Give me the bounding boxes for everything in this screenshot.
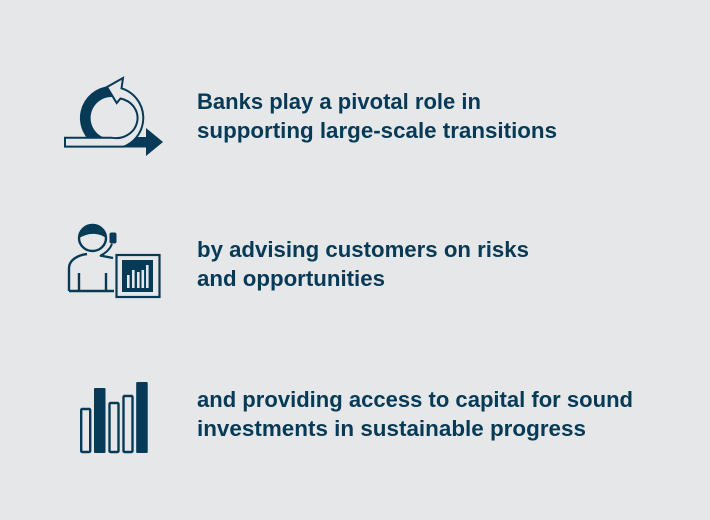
text: access to capital: and providing access to capital for sound xyxy=(197,387,633,412)
text: access to capital xyxy=(197,387,633,441)
icon: adviser with headset and chart xyxy=(69,224,160,297)
text: banks pivotal role xyxy=(197,89,557,143)
icon: circular arrow over forward arrow xyxy=(65,78,163,156)
text: banks pivotal role: supporting large-scale transitions xyxy=(197,118,557,143)
text: advising customers: by advising customers on risks xyxy=(197,237,529,262)
chart frame xyxy=(116,255,160,297)
text: banks pivotal role: Banks play a pivotal role in xyxy=(197,89,481,114)
text: advising customers: and opportunities xyxy=(197,266,385,291)
text: advising customers xyxy=(197,237,529,291)
icon: bar chart xyxy=(81,382,148,453)
text: access to capital: investments in sustainable progress xyxy=(197,416,586,441)
